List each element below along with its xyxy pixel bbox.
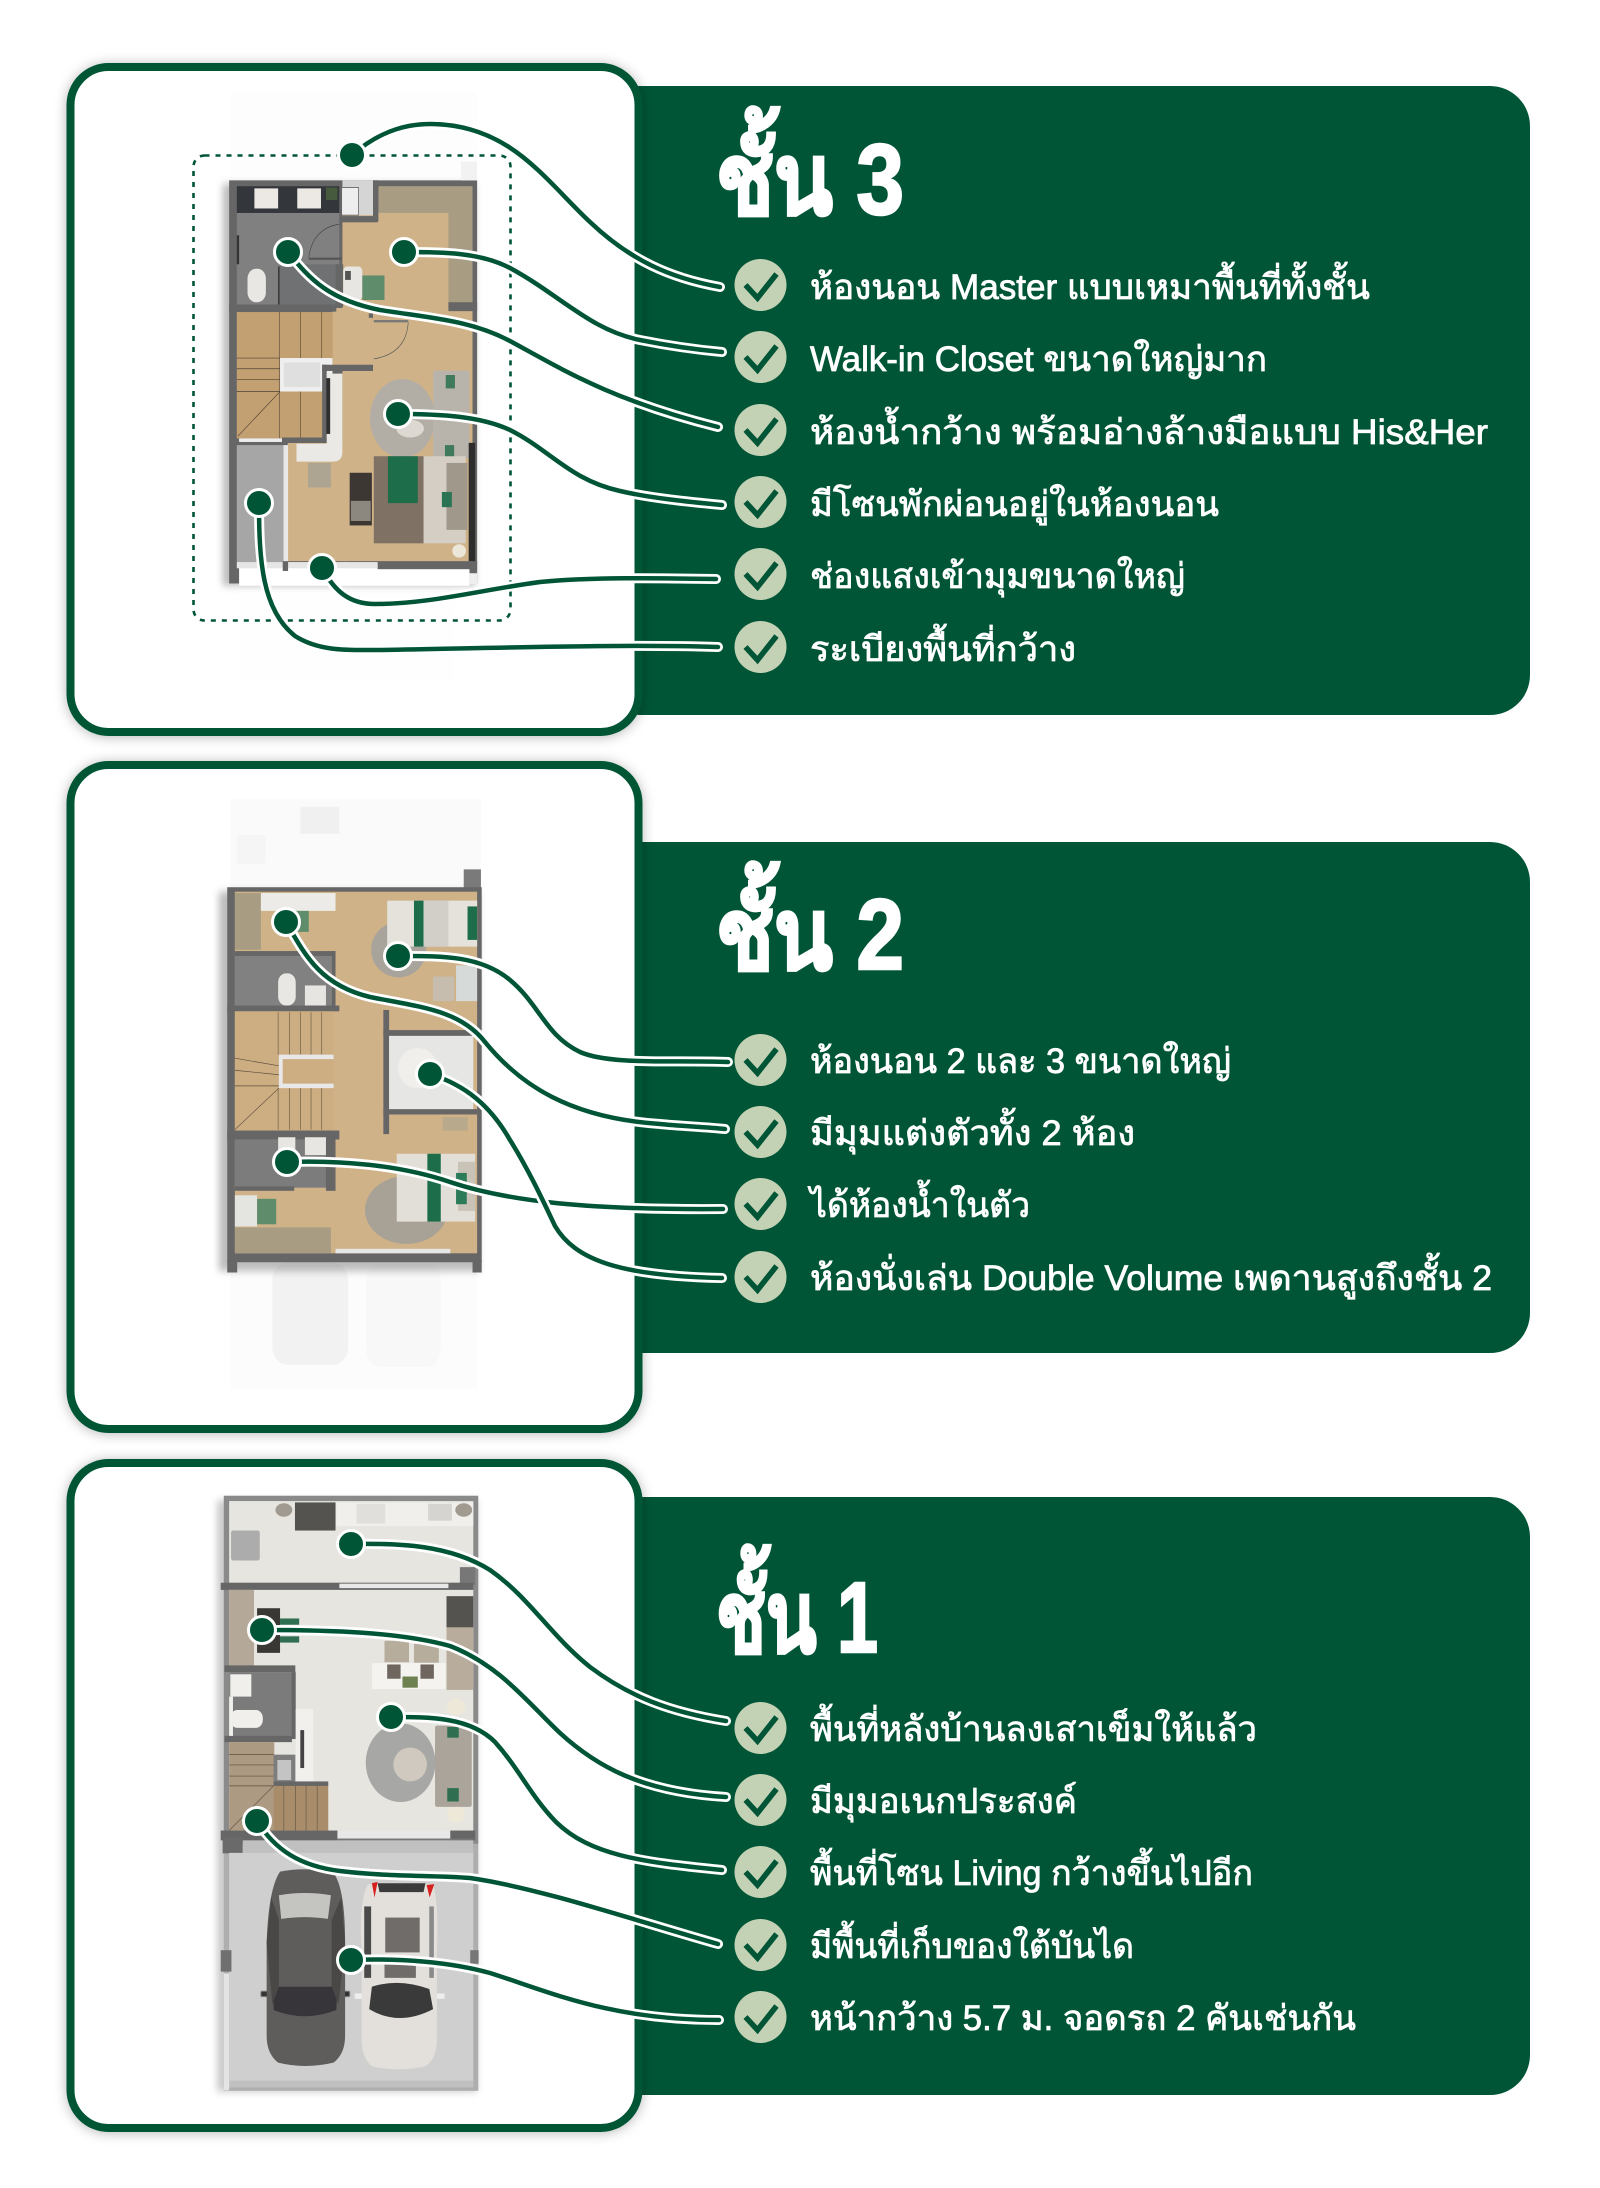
checklist item: en-suite bathroom: ได้ห้องน้ำในตัว bbox=[807, 1179, 1030, 1225]
checklist item: bathroom: ห้องน้ำกว้าง พร้อมอ่างล้างมือแบบ His&Her bbox=[810, 406, 1488, 452]
markers: floor 1 bbox=[244, 1530, 404, 1974]
heading: floor 2: ชั้น 2 bbox=[716, 861, 904, 991]
shaft bbox=[342, 180, 373, 215]
checklist item: bedrooms 2 and 3 bbox=[734, 1034, 1231, 1086]
connector: floor 1 multipurpose corner bbox=[262, 1630, 726, 1797]
bedroom floor bbox=[332, 308, 473, 366]
stairs bbox=[229, 1742, 274, 1831]
counter bbox=[296, 374, 342, 462]
bed bbox=[469, 443, 475, 561]
checklist item: dressing corners: มีมุมแต่งตัวทั้ง 2 ห้อง bbox=[810, 1107, 1135, 1154]
panel: floor 3 green background bbox=[600, 86, 1530, 715]
top bedroom bbox=[371, 922, 426, 977]
rug and sofa bbox=[370, 379, 435, 458]
rug and sofa bbox=[366, 1723, 435, 1802]
yard bbox=[229, 1501, 473, 1583]
wood floor bbox=[235, 892, 477, 1253]
heading: floor 1: ชั้น 1 bbox=[716, 1544, 878, 1674]
connector: floor 1 backyard bbox=[351, 1544, 726, 1721]
connector: floor 2 dressing corner bbox=[286, 922, 725, 1129]
checklist item: living zone: พื้นที่โซน Living กว้างขึ้นไปอีก bbox=[810, 1847, 1253, 1893]
checklist item: dressing corners bbox=[734, 1106, 1135, 1158]
checklist item: lounge zone: มีโซนพักผ่อนอยู่ในห้องนอน bbox=[810, 484, 1219, 525]
connector: floor 3 balcony bbox=[259, 503, 718, 650]
stairs bbox=[237, 312, 332, 438]
checklist item: master bedroom bbox=[734, 259, 1370, 311]
bottom bath bbox=[227, 1131, 339, 1139]
checklist item: multipurpose corner: มีมุมอเนกประสงค์ bbox=[810, 1782, 1077, 1822]
top bath bbox=[235, 951, 336, 956]
living floor bbox=[229, 1590, 473, 1831]
checklist item: parking: หน้ากว้าง 5.7 ม. จอดรถ 2 คันเช่นกัน bbox=[810, 1999, 1356, 2038]
checklist item: walk-in closet: Walk-in Closet ขนาดใหญ่มาก bbox=[810, 339, 1267, 379]
checklist item: living zone bbox=[734, 1846, 1253, 1898]
card: floor 3 plan frame bbox=[70, 67, 638, 732]
connector: floor 3 walk-in closet bbox=[404, 252, 722, 352]
bath bbox=[225, 1665, 295, 1672]
card: floor 1 plan frame bbox=[70, 1463, 638, 2128]
checklist item: lounge zone bbox=[734, 476, 1219, 528]
car: dark bbox=[261, 1869, 350, 2066]
checklist item: skylight bbox=[734, 548, 1185, 600]
card: floor 2 plan frame bbox=[70, 765, 638, 1429]
bathroom bbox=[237, 186, 339, 307]
markers: floor 3 bbox=[246, 142, 418, 582]
checklist item: backyard bbox=[734, 1702, 1257, 1754]
checklist item: double volume bbox=[734, 1251, 1492, 1303]
connector: floor 3 skylight bbox=[322, 568, 716, 604]
connector: floor 1 living zone bbox=[391, 1717, 722, 1870]
connector: floor 2 en-suite bathroom bbox=[287, 1162, 723, 1209]
top left dressing bbox=[235, 893, 261, 950]
panel: floor 1 green background bbox=[600, 1497, 1530, 2095]
connector: floor 3 master bedroom bbox=[352, 124, 720, 287]
front wall bbox=[221, 1831, 337, 1840]
walk-in closet bbox=[342, 212, 473, 310]
checklist item: double volume: ห้องนั่งเล่น Double Volume เพดานสูงถึงชั้น 2 bbox=[810, 1252, 1492, 1299]
checklist item: master bedroom: ห้องนอน Master แบบเหมาพื้นที่ทั้งชั้น bbox=[810, 261, 1370, 307]
floor plan: floor 2 bbox=[219, 799, 482, 1389]
floor plan: floor 1 bbox=[217, 1496, 479, 2092]
checklist item: balcony: ระเบียงพื้นที่กว้าง bbox=[810, 623, 1076, 669]
connector: floor 3 bathroom bbox=[288, 252, 718, 427]
checklist item: backyard: พื้นที่หลังบ้านลงเสาเข็มให้แล้ว bbox=[810, 1703, 1257, 1749]
heading: floor 3: ชั้น 3 bbox=[716, 106, 904, 236]
balcony bbox=[237, 445, 283, 562]
double volume bbox=[383, 1010, 389, 1134]
markers: floor 2 bbox=[272, 908, 444, 1176]
checklist item: balcony bbox=[734, 621, 1076, 673]
stairs bbox=[235, 1011, 334, 1131]
checklist item: en-suite bathroom bbox=[734, 1178, 1030, 1230]
panel: floor 2 green background bbox=[600, 842, 1530, 1353]
checklist item: under-stair storage: มีพื้นที่เก็บของใต้บันได bbox=[810, 1920, 1134, 1966]
car: white bbox=[355, 1882, 445, 2069]
connector: floor 1 under-stair storage bbox=[257, 1821, 718, 1944]
connector: floor 2 bedrooms bbox=[398, 956, 728, 1062]
connector: floor 3 lounge bbox=[398, 414, 722, 505]
connector: floor 1 parking bbox=[351, 1960, 719, 2020]
checklist item: parking bbox=[734, 1991, 1356, 2043]
checklist item: multipurpose corner bbox=[734, 1774, 1077, 1826]
checklist item: bathroom bbox=[734, 404, 1488, 456]
checklist item: bedrooms 2 and 3: ห้องนอน 2 และ 3 ขนาดใหญ่ bbox=[810, 1041, 1231, 1081]
floor plan: floor 3 bbox=[223, 92, 477, 679]
driveway bbox=[229, 1853, 473, 2087]
bottom bedroom bbox=[365, 1176, 448, 1244]
connector: floor 2 double volume bbox=[430, 1074, 722, 1278]
dotted outline: floor 3 area bbox=[194, 156, 510, 620]
checklist item: under-stair storage bbox=[734, 1919, 1134, 1971]
tv console bbox=[296, 1709, 313, 1781]
checklist item: skylight: ช่องแสงเข้ามุมขนาดใหญ่ bbox=[810, 556, 1185, 597]
checklist item: walk-in closet bbox=[734, 331, 1267, 383]
